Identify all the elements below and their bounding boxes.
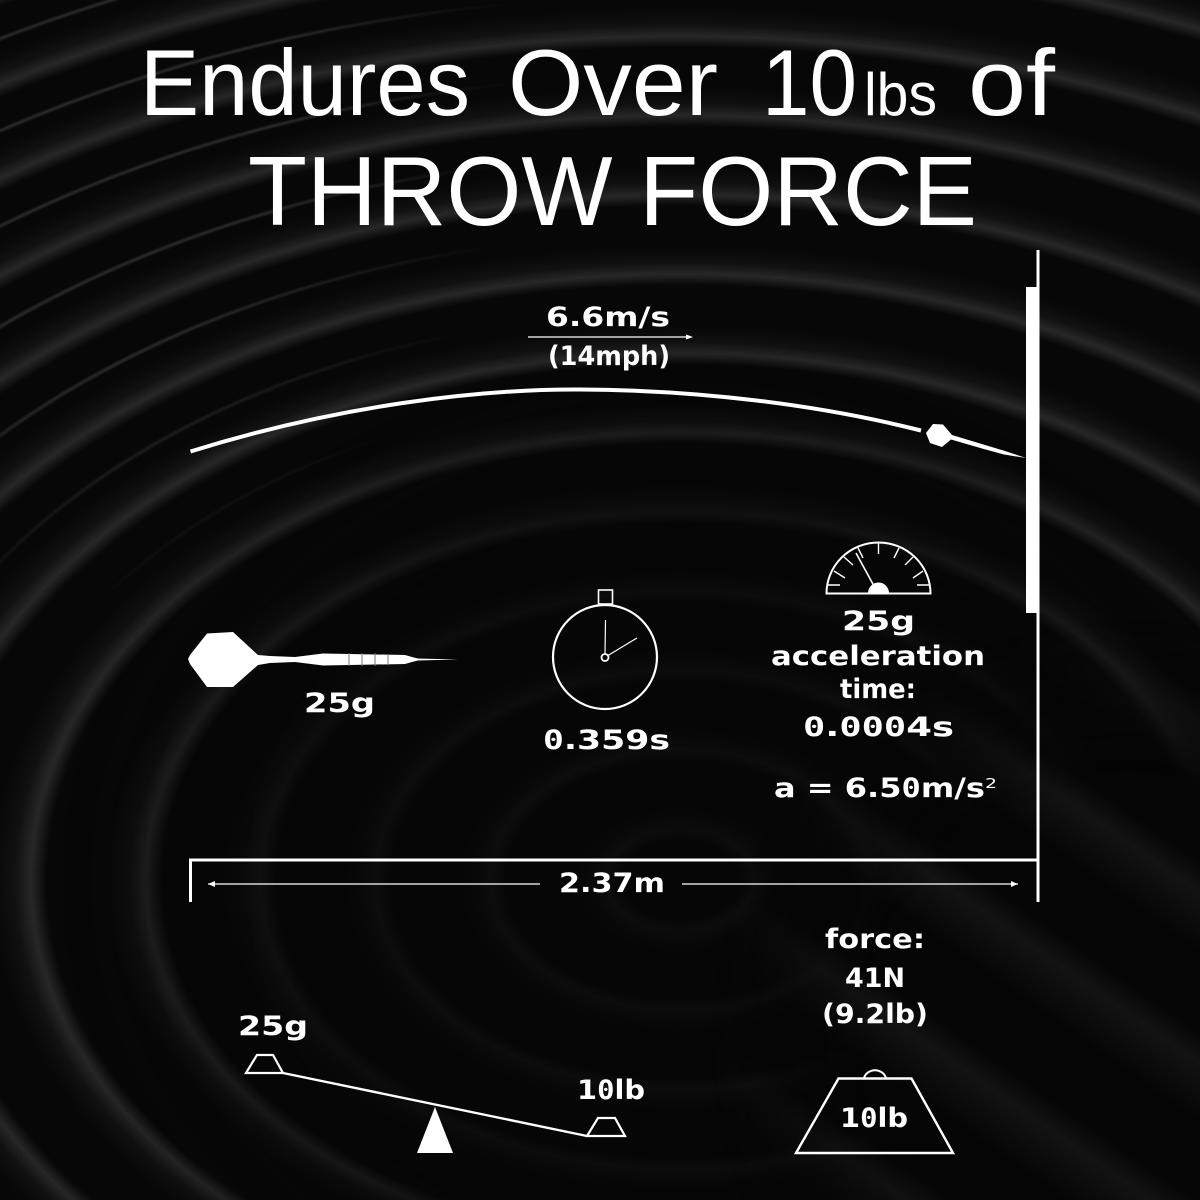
title: of (968, 30, 1056, 135)
title: lbs (864, 61, 937, 128)
background: diagonal bands lower right (836, 723, 1200, 1200)
dart in flight (926, 424, 1026, 458)
force text: (9.2lb) (822, 999, 928, 1030)
trajectory arc (190, 389, 921, 452)
speed label (528, 302, 693, 372)
speed label: 6.6m/s (546, 302, 670, 333)
title (140, 30, 1056, 246)
stopwatch time: 0.359s (543, 725, 670, 756)
seesaw diagram (238, 1011, 645, 1153)
force text (822, 924, 928, 1030)
title: THROW FORCE (248, 136, 977, 246)
distance bracket (190, 860, 1038, 902)
stopwatch icon (553, 590, 657, 709)
seesaw diagram: 10lb (577, 1075, 645, 1106)
acceleration text (771, 606, 985, 743)
acceleration formula: a = 6.5 0m/s (774, 773, 985, 804)
dart weight label: 25g (304, 688, 375, 719)
force text: 41N (845, 963, 905, 994)
speed label: (14mph) (548, 341, 670, 372)
seesaw diagram: 25g (238, 1011, 308, 1042)
distance label: 2.37m (559, 868, 665, 899)
dartboard wall (1026, 250, 1040, 902)
acceleration text: 0.000 4s (803, 712, 954, 743)
acceleration text: acceleration (771, 641, 985, 672)
force text: force: (825, 924, 925, 955)
acceleration text: 25g (842, 606, 915, 637)
title: Endures (140, 30, 470, 135)
weight icon: 10lb (840, 1103, 908, 1134)
acceleration text: time: (840, 674, 916, 705)
title: 10 (762, 30, 857, 135)
acceleration formula: 2 (985, 777, 997, 792)
background: thin arc lines upper left (0, 0, 462, 562)
speedometer icon (826, 543, 930, 594)
weight icon (796, 1070, 953, 1153)
dart icon (188, 632, 458, 687)
title: Over (508, 30, 718, 135)
